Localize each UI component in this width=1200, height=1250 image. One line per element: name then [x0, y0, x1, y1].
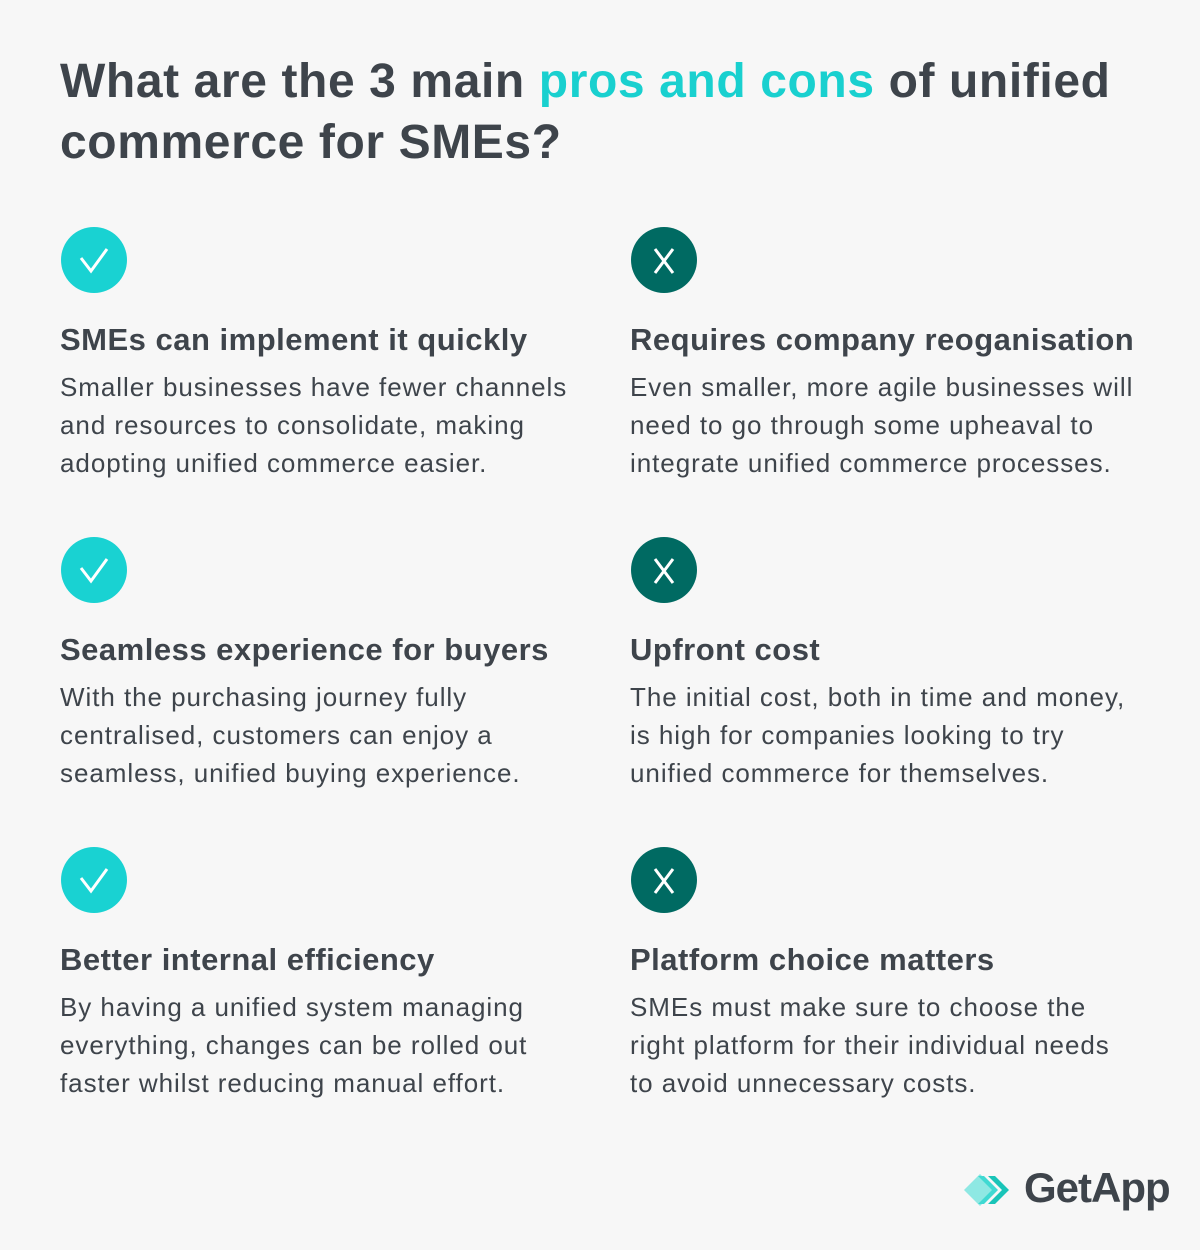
- con 1: need to go through some upheaval to: [630, 410, 1094, 440]
- con 3: [630, 942, 1110, 1098]
- pro 1: SMEs can implement it quickly: [60, 322, 528, 357]
- con 1: [630, 322, 1134, 478]
- con 2: is high for companies looking to try: [630, 720, 1065, 750]
- con 3: SMEs must make sure to choose the: [630, 992, 1086, 1022]
- pro 3: Better internal efficiency: [60, 942, 435, 977]
- icon: logo chevrons: [964, 1174, 1009, 1206]
- logo: GetApp: GetApp: [1024, 1164, 1170, 1211]
- pro 2: Seamless experience for buyers: [60, 632, 549, 667]
- pro 2: seamless, unified buying experience.: [60, 758, 521, 788]
- con 2: The initial cost, both in time and money,: [630, 682, 1125, 712]
- pro 3: everything, changes can be rolled out: [60, 1030, 527, 1060]
- pro 2: [60, 632, 549, 788]
- title: [60, 55, 1111, 169]
- pro 3: faster whilst reducing manual effort.: [60, 1068, 505, 1098]
- icon: check 2: [61, 537, 127, 603]
- pro 2: With the purchasing journey fully: [60, 682, 467, 712]
- con 1: integrate unified commerce processes.: [630, 448, 1112, 478]
- title: commerce for SMEs?: [60, 116, 562, 169]
- icon: cross 1: [631, 227, 697, 293]
- icon: cross 3: [631, 847, 697, 913]
- con 3: Platform choice matters: [630, 942, 995, 977]
- icon: check 3: [61, 847, 127, 913]
- icon: cross 2: [631, 537, 697, 603]
- con 2: [630, 632, 1125, 788]
- title: What are the 3 main pros and cons of unified: [60, 55, 1111, 108]
- pro 1: Smaller businesses have fewer channels: [60, 372, 567, 402]
- pro 3: [60, 942, 527, 1098]
- con 3: right platform for their individual needs: [630, 1030, 1110, 1060]
- icon: check 1: [61, 227, 127, 293]
- con 3: to avoid unnecessary costs.: [630, 1068, 976, 1098]
- pro 3: By having a unified system managing: [60, 992, 524, 1022]
- con 1: Requires company reoganisation: [630, 322, 1134, 357]
- pro 1: [60, 322, 567, 478]
- pro 1: and resources to consolidate, making: [60, 410, 525, 440]
- pro 2: centralised, customers can enjoy a: [60, 720, 493, 750]
- con 2: unified commerce for themselves.: [630, 758, 1049, 788]
- con 2: Upfront cost: [630, 632, 820, 667]
- con 1: Even smaller, more agile businesses will: [630, 372, 1133, 402]
- pro 1: adopting unified commerce easier.: [60, 448, 487, 478]
